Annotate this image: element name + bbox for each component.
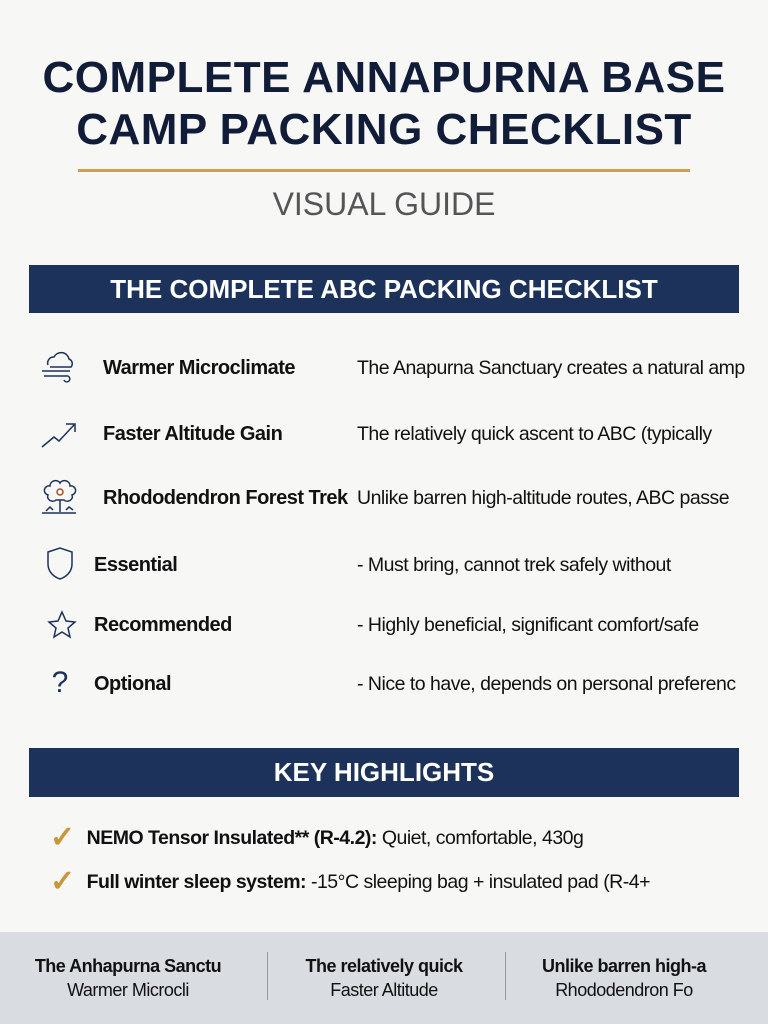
heading bar: key highlights: KEY HIGHLIGHTS [274,757,494,787]
row: optional: Optional [94,673,171,695]
row: recommended: - Highly beneficial, significant comfort/safe [357,614,699,636]
icon: cloud wind [42,352,73,383]
icon: star [47,610,77,639]
title [43,53,725,154]
row: optional [52,666,736,699]
footer col 3: Unlike barren high-a [542,956,706,976]
footer col 3 [542,956,707,1000]
row: essential: Essential [94,554,177,576]
row: faster altitude gain: Faster Altitude Gain [103,423,282,445]
footer col 2: Faster Altitude [330,980,438,1000]
row: faster altitude gain [42,423,712,448]
row: recommended [47,610,699,639]
row: essential [47,547,672,580]
highlight 1 [50,821,583,854]
footer col 2: The relatively quick [305,956,463,976]
row: optional: - Nice to have, depends on personal preferenc [357,673,736,695]
icon: shield [47,547,73,580]
row: rhododendron [42,480,729,514]
row: recommended: Recommended [94,614,232,636]
row: warmer microclimate: The Anapurna Sanctuary creates a natural amp [357,357,745,379]
icon: trend arrow [42,423,76,448]
footer col 1 [35,956,221,1000]
gold divider [78,169,690,172]
heading bar: checklist [29,265,739,313]
subtitle: VISUAL GUIDE [273,186,495,222]
heading bar: key highlights [29,748,739,797]
title: CAMP PACKING CHECKLIST [76,105,692,154]
icon: question: ? [52,666,68,699]
highlight 2 [50,865,650,898]
title: COMPLETE ANNAPURNA BASE [43,53,725,102]
highlight 1: ✓ [50,821,75,854]
heading bar: checklist: THE COMPLETE ABC PACKING CHECKLIST [110,274,658,304]
highlight 2: Full winter sleep system: -15°C sleeping bag + insulated pad (R-4+ [87,871,650,893]
footer col 1: The Anhapurna Sanctu [35,956,221,976]
highlight 1: NEMO Tensor Insulated** (R-4.2): Quiet, comfortable, 430g [87,827,583,849]
row: rhododendron: Rhododendron Forest Trek [103,487,348,509]
footer col 2 [305,956,463,1000]
row: warmer microclimate: Warmer Microclimate [103,357,295,379]
row: faster altitude gain: The relatively quick ascent to ABC (typically [357,423,712,445]
row: warmer microclimate [42,352,745,383]
footer col 1: Warmer Microcli [67,980,189,1000]
footer [0,932,768,1024]
row: rhododendron: Unlike barren high-altitude routes, ABC passe [357,487,729,509]
footer col 3: Rhododendron Fo [555,980,693,1000]
icon: tree flower [42,480,76,514]
highlight 2: ✓ [50,865,75,898]
row: essential: - Must bring, cannot trek safely without [357,554,671,576]
